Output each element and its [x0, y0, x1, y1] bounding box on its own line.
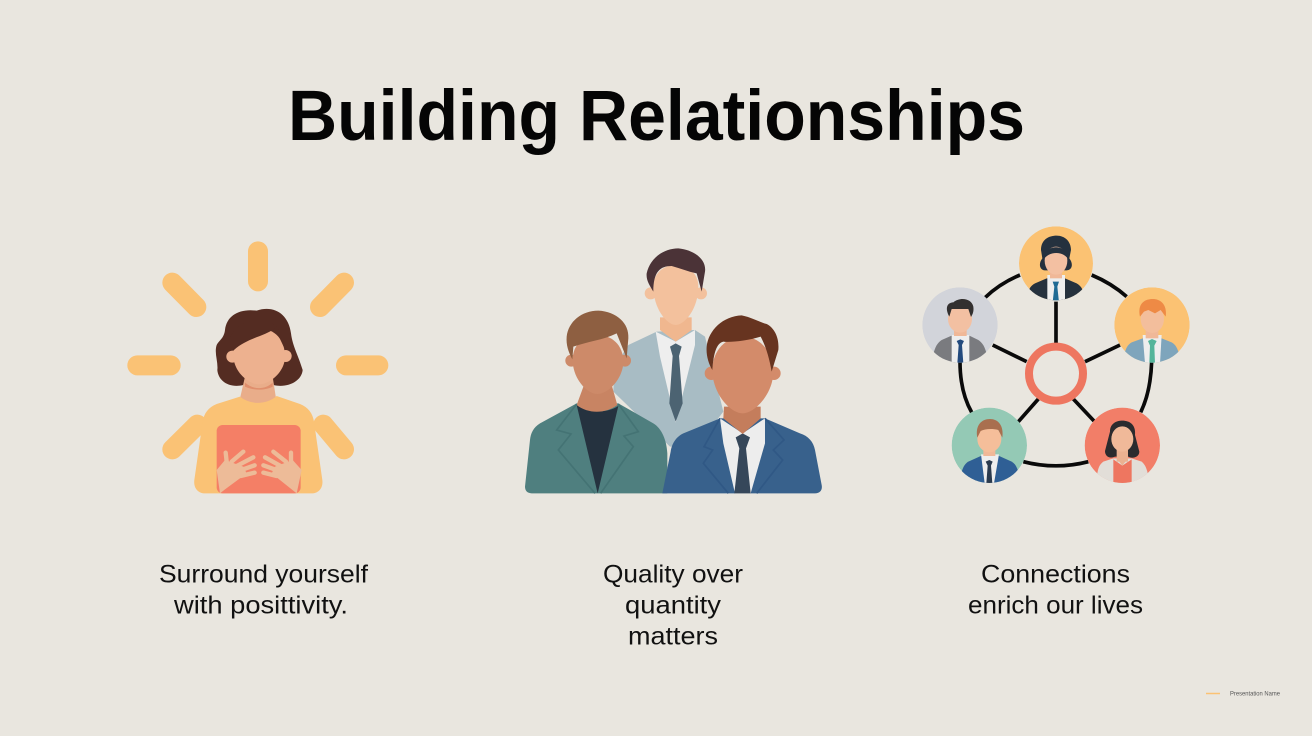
face: [233, 328, 285, 384]
icon: sun rays: [137, 251, 378, 365]
avatar: bottom right: [1085, 408, 1160, 485]
sweater: [194, 396, 322, 493]
hair: [216, 309, 303, 386]
icon: three people: [525, 248, 822, 493]
neck shadow: [245, 383, 273, 390]
left hand: [217, 452, 255, 493]
network lines: [960, 275, 1152, 466]
caption: with posittivity.: [173, 592, 348, 620]
avatar: bottom left: [952, 408, 1027, 485]
caption: quantity: [625, 592, 722, 620]
caption: enrich our lives: [968, 592, 1143, 620]
title: Building Relationships: [288, 77, 1025, 156]
avatar: top: [1019, 226, 1093, 305]
neck: [240, 377, 276, 403]
caption: [968, 560, 1143, 620]
caption: Quality over: [603, 560, 743, 588]
icon: people network: [922, 226, 1190, 485]
heart pillow: [217, 425, 301, 493]
panel: surround yourself with positivity: [137, 251, 378, 619]
caption: matters: [628, 622, 718, 650]
footer mark: Presentation Name: [1230, 692, 1281, 698]
right hand: [263, 452, 302, 493]
footer mark: [1206, 692, 1281, 698]
caption: Surround yourself: [159, 560, 368, 588]
left person: [525, 311, 667, 493]
infographic canvas: [127, 88, 1280, 696]
caption: Connections: [981, 560, 1130, 588]
caption: [159, 560, 368, 620]
fringe: [227, 320, 284, 352]
back person: [613, 248, 723, 447]
ears: [226, 351, 238, 363]
avatar: right: [1114, 287, 1190, 365]
arms: [172, 425, 344, 449]
avatar: left: [922, 287, 998, 365]
panel: quality over quantity: [525, 248, 822, 651]
center ring: [1029, 347, 1083, 401]
icon: positive person with radiating rays: [137, 251, 378, 493]
right person: [662, 315, 822, 493]
caption: [603, 560, 743, 650]
panel: connections enrich our lives: [922, 226, 1190, 620]
